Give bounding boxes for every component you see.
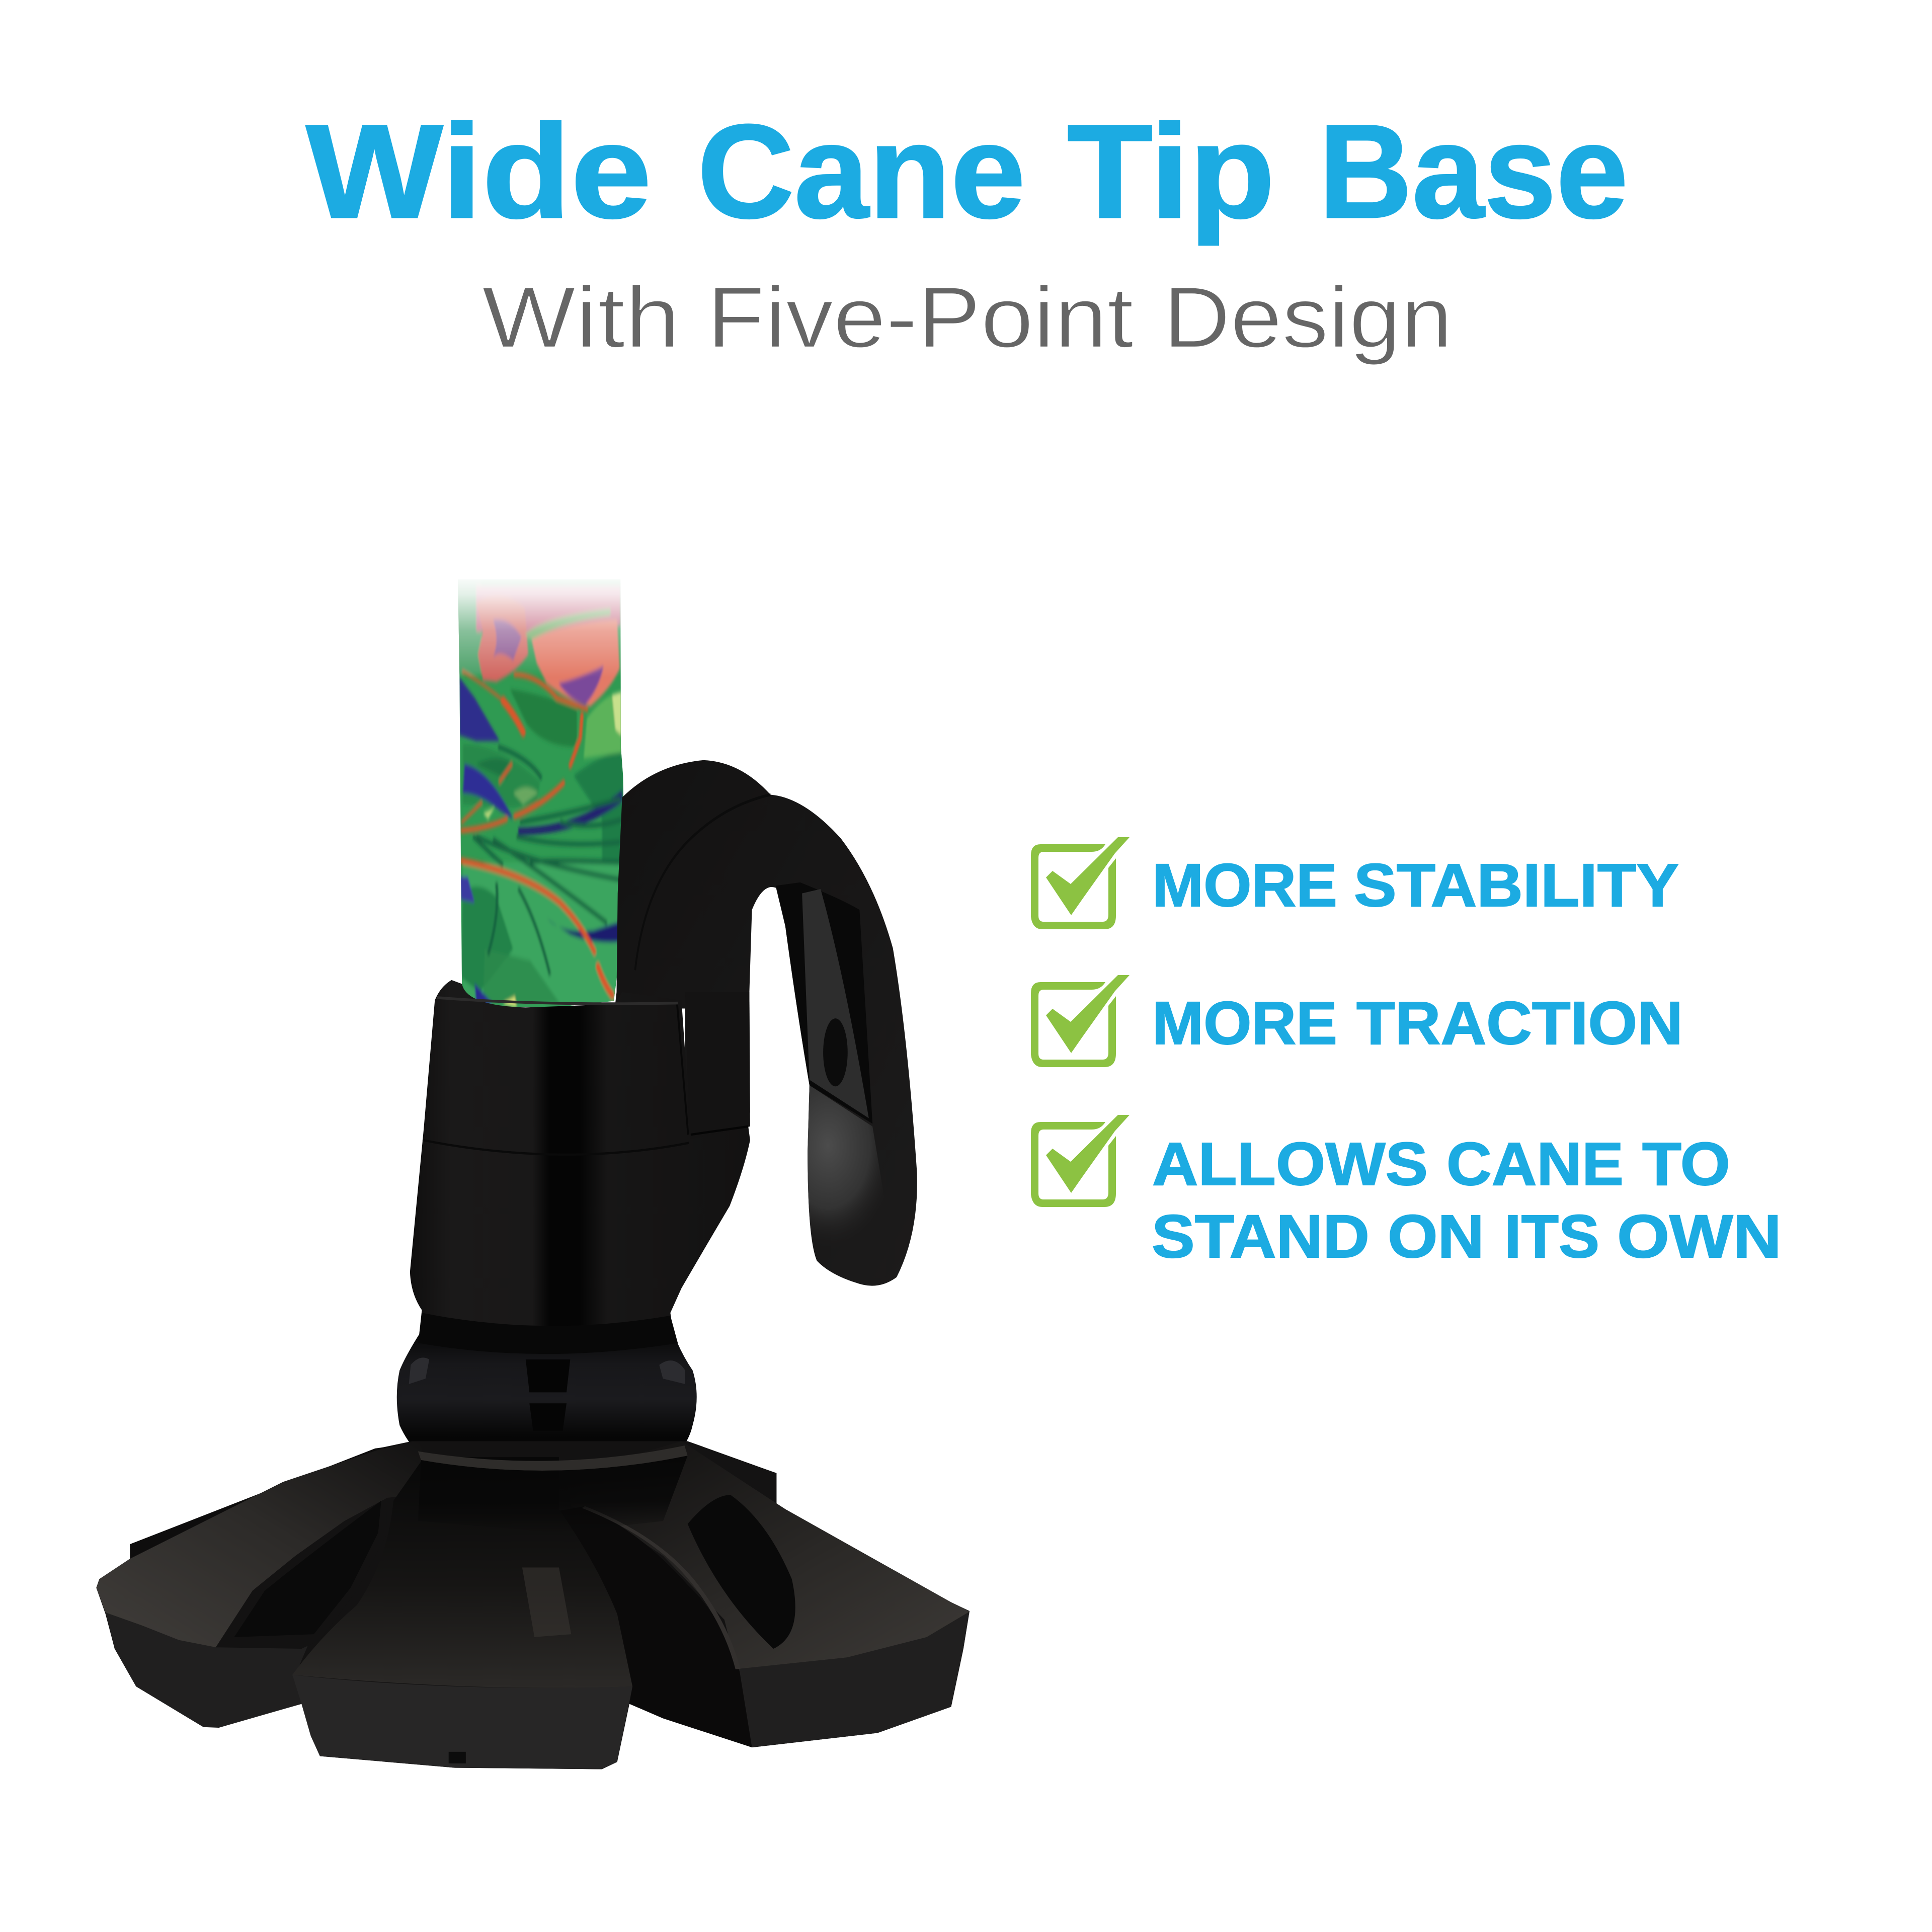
title: Base <box>1319 97 1628 246</box>
benefit: more traction: MORE <box>1152 989 1337 1057</box>
dark purple leaves <box>459 678 500 741</box>
rear feet <box>130 1442 430 1562</box>
collar ring <box>418 1445 688 1471</box>
benefit: more traction <box>1152 989 1683 1057</box>
title <box>306 97 1628 247</box>
benefit: more traction: TRACTION <box>1356 989 1683 1057</box>
center foot <box>292 1457 632 1769</box>
benefit: more stability: STABILITY <box>1354 851 1679 919</box>
title: Wide <box>306 97 652 246</box>
clip arm <box>615 760 917 1286</box>
icon: check box 1 <box>1031 837 1130 929</box>
benefit: allows cane to stand on its own: ALLOWS <box>1152 1130 1428 1198</box>
clip inner slot <box>776 882 872 1123</box>
dark green veins <box>473 747 624 975</box>
orange stems <box>462 672 612 995</box>
benefit list <box>1031 837 1782 1270</box>
shaft top fade <box>454 574 627 678</box>
right foot <box>559 1441 970 1747</box>
title: Cane <box>697 97 1025 246</box>
base silhouette <box>96 1441 970 1769</box>
title: Tip <box>1067 97 1275 247</box>
subtitle <box>482 269 1453 366</box>
benefit: allows cane to stand on its own: STAND <box>1152 1202 1370 1270</box>
benefit: more stability <box>1152 851 1679 919</box>
collar shadow <box>418 1456 688 1533</box>
flowers <box>476 585 620 640</box>
black holder and clip <box>397 760 917 1453</box>
holder neck band <box>418 1313 678 1354</box>
benefit: allows cane to stand on its own: ON <box>1388 1202 1484 1270</box>
benefit: allows cane to stand on its own: OWN <box>1617 1202 1782 1270</box>
benefit: allows cane to stand on its own <box>1152 1130 1782 1270</box>
subtitle: Five-Point <box>707 269 1134 366</box>
benefit: more stability: MORE <box>1152 851 1337 919</box>
holder body <box>410 980 750 1354</box>
infographic canvas <box>96 120 1778 1769</box>
ball reflections <box>526 1359 570 1392</box>
clip hole <box>823 1018 848 1086</box>
clip lower sheen <box>808 1085 895 1283</box>
subtitle: With <box>482 269 680 366</box>
benefit: allows cane to stand on its own: CANE <box>1446 1130 1624 1198</box>
five-point base <box>96 1441 970 1769</box>
product photo: cane tip <box>96 574 970 1769</box>
subtitle: Design <box>1163 269 1453 366</box>
benefit: allows cane to stand on its own: ITS <box>1504 1202 1599 1270</box>
ball joint <box>397 1335 697 1453</box>
icon: check box 3 <box>1031 1115 1130 1207</box>
left foot <box>96 1441 433 1728</box>
cane shaft with floral pattern <box>454 574 627 1012</box>
icon: check box 2 <box>1031 975 1130 1067</box>
benefit: allows cane to stand on its own: TO <box>1642 1130 1730 1198</box>
